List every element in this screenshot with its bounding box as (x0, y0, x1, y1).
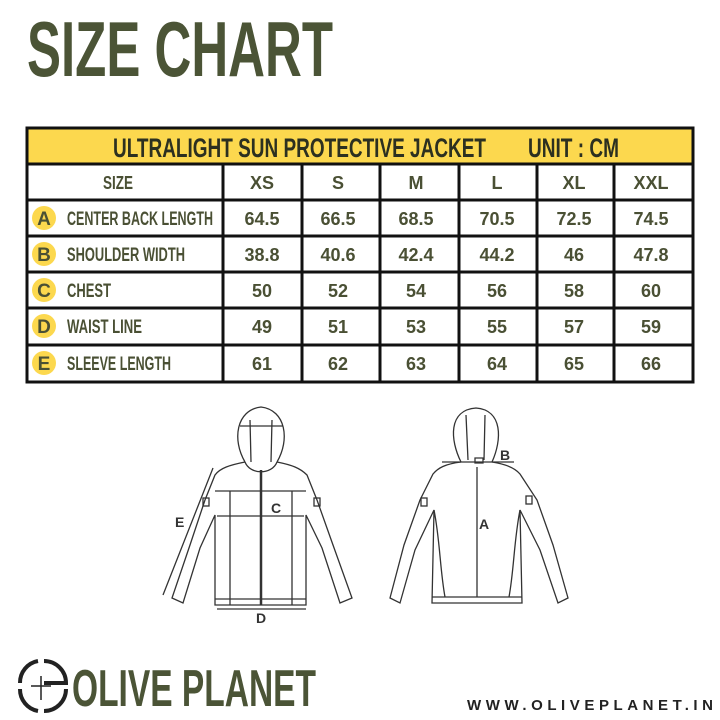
back labels: B (500, 447, 510, 463)
table values: 51 (328, 317, 348, 337)
size header row: S (332, 173, 344, 193)
arrow B (442, 461, 514, 463)
size header row: XS (250, 173, 274, 193)
table values: 72.5 (556, 209, 592, 229)
back labels: A (479, 516, 489, 532)
row labels with yellow letter badges: WAIST LINE (67, 317, 142, 338)
arrow E (163, 468, 213, 595)
table values: 68.5 (398, 209, 434, 229)
front labels: E (175, 514, 184, 530)
table values: 50 (252, 281, 272, 301)
table values: 55 (487, 317, 507, 337)
table values: 63 (406, 354, 426, 374)
front jacket diagram (163, 407, 352, 609)
size header row: SIZE (103, 173, 133, 193)
row labels with yellow letter badges: E (38, 354, 50, 375)
row labels with yellow letter badges: B (37, 245, 51, 266)
table values: 66 (641, 354, 661, 374)
table header bar: ULTRALIGHT SUN PROTECTIVE JACKET (113, 133, 486, 163)
row labels with yellow letter badges: CENTER BACK LENGTH (67, 209, 213, 230)
size header row: XXL (633, 173, 669, 193)
table values: 74.5 (633, 209, 669, 229)
table values: 47.8 (633, 245, 669, 265)
row labels with yellow letter badges: D (37, 317, 51, 338)
arrow C (217, 515, 304, 517)
table values: 53 (406, 317, 426, 337)
size header row: XL (562, 173, 586, 193)
table values (244, 209, 669, 374)
table values: 61 (252, 354, 272, 374)
table values: 42.4 (398, 245, 434, 265)
back labels (479, 447, 510, 532)
table values: 44.2 (479, 245, 515, 265)
table values: 70.5 (479, 209, 515, 229)
size header row: L (492, 173, 502, 193)
table values: 49 (252, 317, 272, 337)
table values: 64.5 (244, 209, 280, 229)
front labels: C (271, 500, 281, 516)
size header row: M (408, 173, 424, 193)
size header row (103, 173, 669, 193)
table header bar (27, 128, 693, 164)
table values: 65 (564, 354, 584, 374)
row labels with yellow letter badges: C (37, 281, 51, 302)
table header bar: UNIT : CM (528, 133, 619, 163)
row labels with yellow letter badges: SHOULDER WIDTH (67, 245, 185, 266)
table values: 38.8 (244, 245, 280, 265)
table values: 58 (564, 281, 584, 301)
table values: 66.5 (320, 209, 356, 229)
back jacket diagram (390, 408, 568, 603)
website: WWW.OLIVEPLANET.IN (467, 697, 713, 714)
table values: 56 (487, 281, 507, 301)
front labels: D (256, 610, 266, 626)
table values: 57 (564, 317, 584, 337)
table values: 62 (328, 354, 348, 374)
size table (27, 128, 693, 382)
table values: 52 (328, 281, 348, 301)
row labels with yellow letter badges: A (37, 209, 51, 230)
table values: 40.6 (320, 245, 356, 265)
table values: 59 (641, 317, 661, 337)
row labels with yellow letter badges: CHEST (67, 281, 111, 302)
row labels with yellow letter badges: SLEEVE LENGTH (67, 354, 171, 375)
arrow D (217, 608, 306, 610)
table values: 60 (641, 281, 661, 301)
title: SIZE CHART (27, 5, 333, 93)
logo icon (20, 661, 66, 711)
brand name: OLIVE PLANET (72, 660, 316, 718)
table values: 64 (487, 354, 507, 374)
table values: 46 (564, 245, 584, 265)
front labels (175, 500, 281, 626)
row labels with yellow letter badges (32, 206, 213, 375)
table values: 54 (406, 281, 426, 301)
